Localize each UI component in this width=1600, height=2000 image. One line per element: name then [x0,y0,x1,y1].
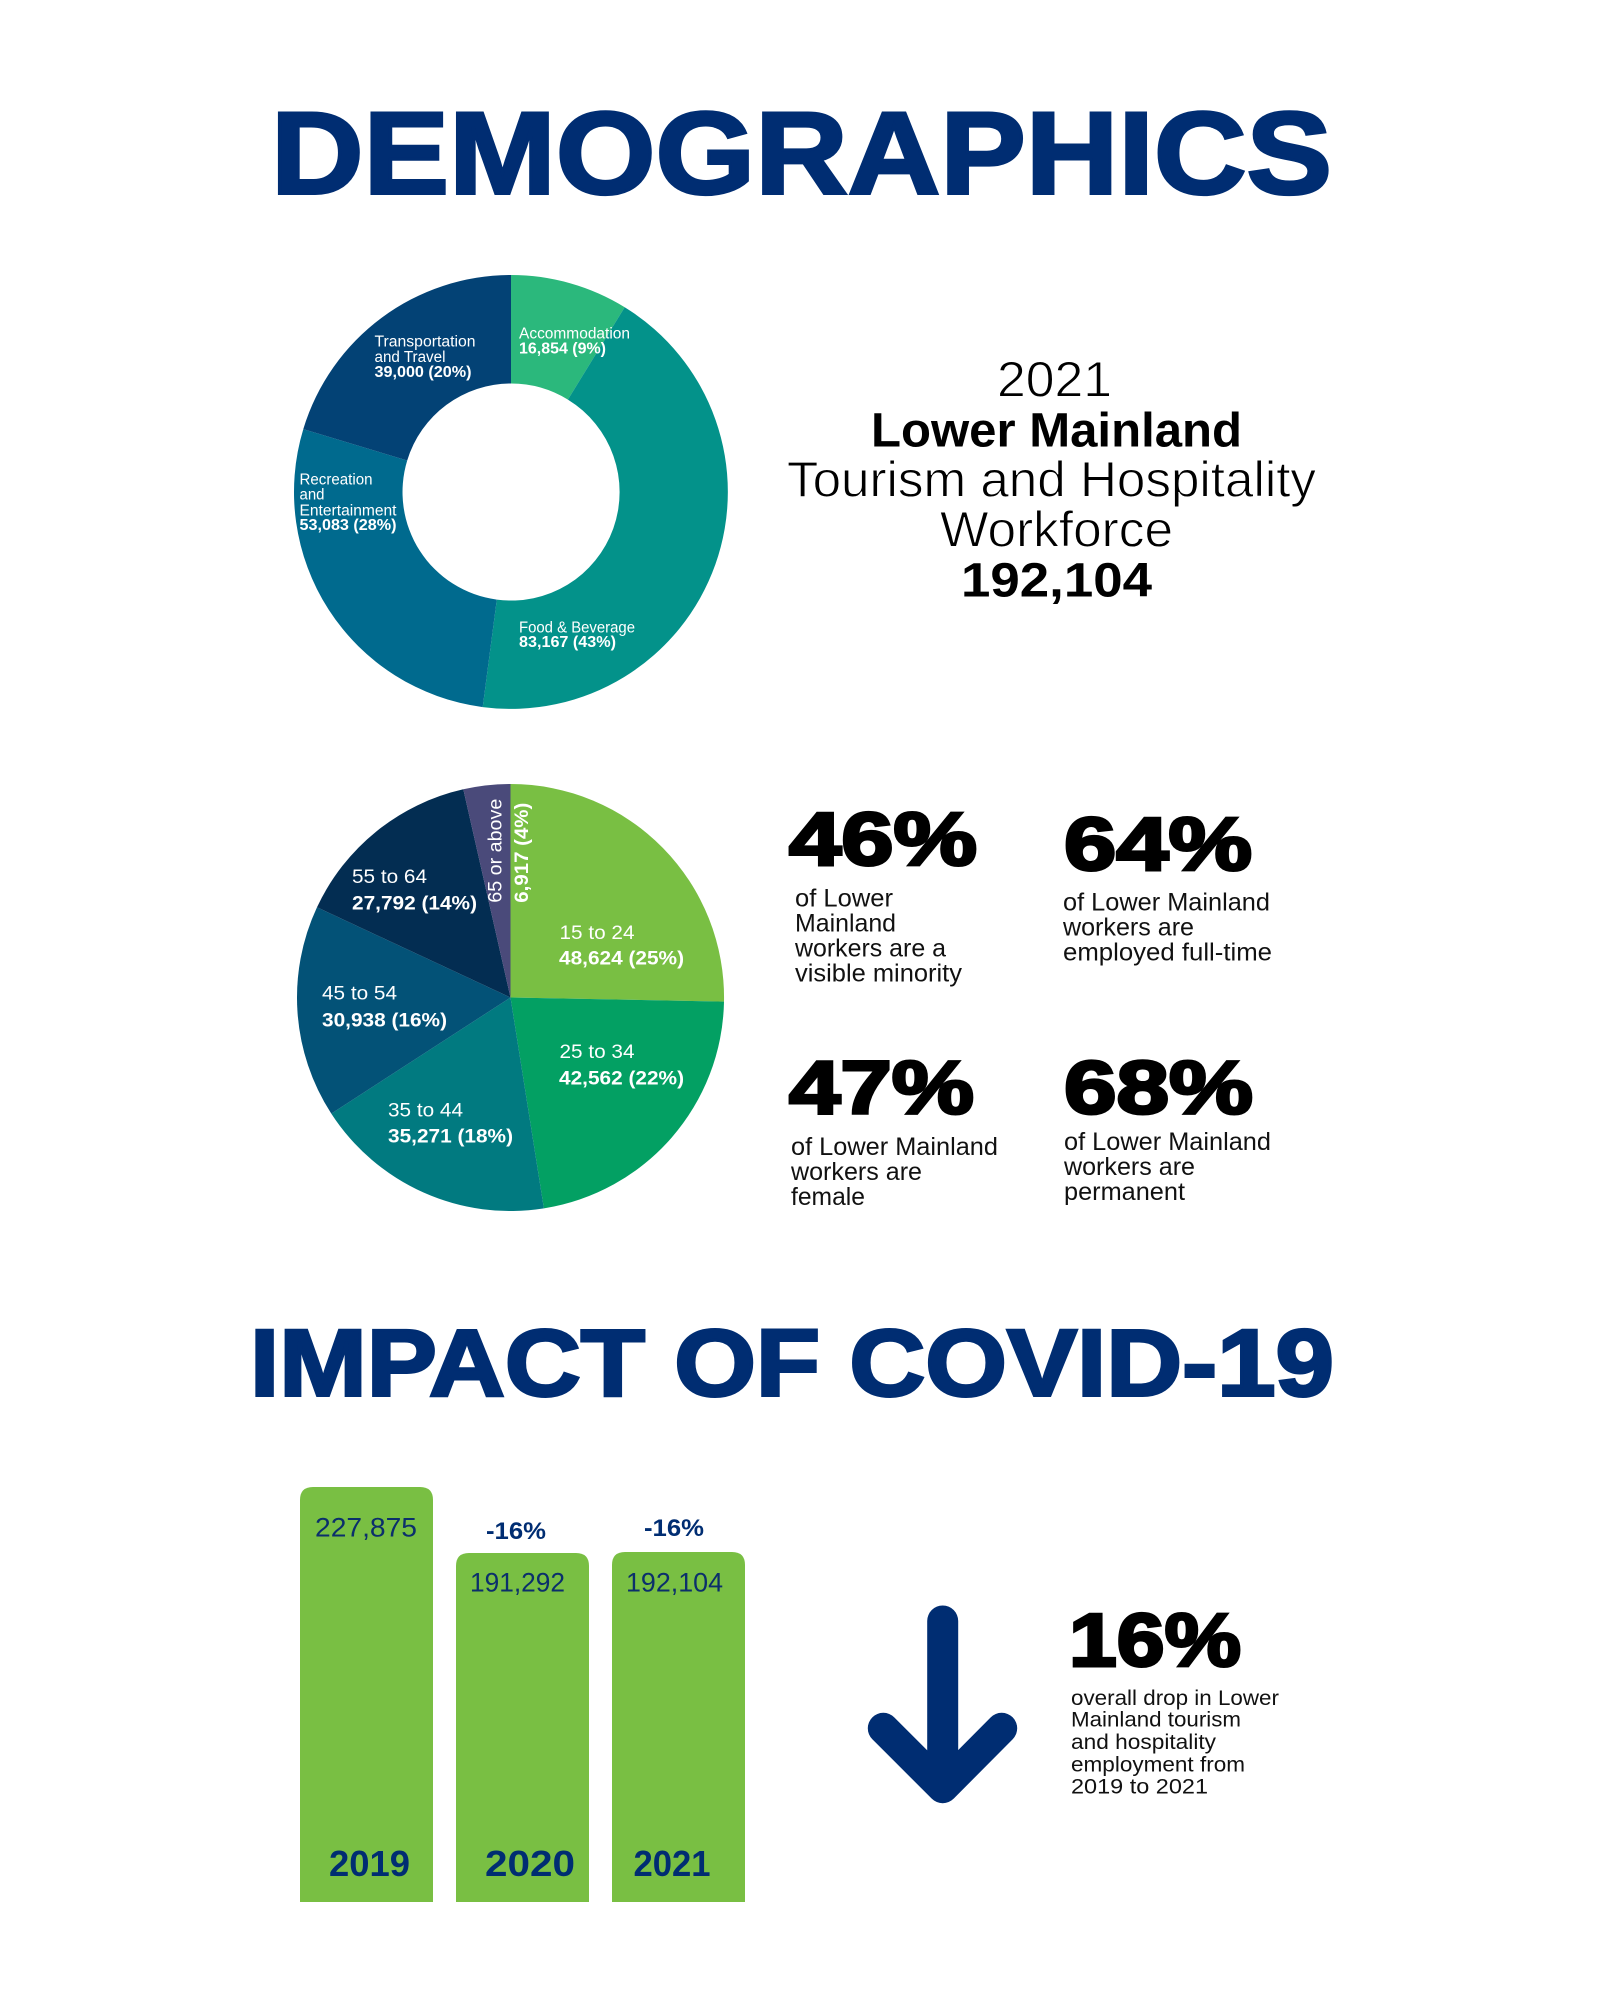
stat: full-time: 64% [1064,802,1252,886]
label: 55 to 64: 27,792 (14%) [352,892,477,914]
bar: 2020 [456,1553,589,1902]
label: 65 or above [484,799,533,903]
label: 45 to 54 [322,983,447,1032]
label: 35 to 44: 35 to 44 [388,1100,463,1122]
bar: 2019 [300,1487,433,1902]
text block: workforce total: 2021 [997,352,1112,408]
label: 65 or above: 6,917 (4%) [511,803,533,903]
stat: overall drop: overall drop in Lower [1071,1686,1279,1710]
bar chart: employment by year [300,1487,745,1902]
stat: full-time [1062,802,1272,967]
label: 25 to 34 [559,1041,684,1089]
slice: 25 to 34 [510,998,724,1208]
change: 2020: -16% [486,1518,546,1545]
year: 2021: 2021 [634,1843,710,1884]
text block: workforce total: 192,104 [961,555,1152,608]
label: recreation and entertainment: 53,083 (28%) [300,517,396,534]
text block: workforce total [787,352,1316,608]
label: accommodation: Accommodation [519,325,630,342]
stat: visible minority: of Lower [795,885,893,913]
label: recreation and entertainment [300,471,397,534]
stat: overall drop: 2019 to 2021 [1071,1774,1208,1798]
bar: 2021 [612,1552,745,1902]
label: recreation and entertainment: and [300,486,324,503]
label: food and beverage: Food & Beverage [519,619,635,636]
label: 45 to 54: 45 to 54 [322,983,397,1005]
label: accommodation: 16,854 (9%) [519,340,606,357]
stat: full-time: workers are [1062,914,1194,942]
slice: food and beverage [483,307,728,709]
label: 35 to 44 [388,1100,513,1148]
donut chart: workforce by sector [294,275,728,709]
label: 35 to 44: 35,271 (18%) [388,1126,513,1148]
stat: permanent: 68% [1064,1046,1253,1130]
stat: female: of Lower Mainland [791,1133,998,1161]
slice: 65 or above [463,784,510,998]
stat: female: female [791,1183,865,1211]
text block: workforce total: Tourism and Hospitality [787,452,1316,508]
stat: overall drop: 16% [1069,1598,1241,1682]
value: 2019: 227,875 [315,1513,417,1543]
label: 45 to 54: 30,938 (16%) [322,1010,447,1032]
label: 25 to 34: 25 to 34 [560,1041,635,1063]
label: transportation and travel [374,334,476,381]
slice: accommodation [511,275,625,400]
slice: transportation and travel [303,275,511,460]
label: food and beverage [519,619,635,651]
year: 2020: 2020 [485,1843,575,1884]
title: Demographics: DEMOGRAPHICS [271,88,1332,218]
label: 15 to 24 [559,922,684,970]
label: transportation and travel: 39,000 (20%) [374,364,472,381]
stat: visible minority: 46% [789,797,977,881]
text block: workforce total: Workforce [940,502,1173,558]
stat: visible minority: workers are a [794,935,946,963]
label: recreation and entertainment: Entertainment [300,502,397,519]
value: 2021: 192,104 [626,1568,723,1598]
label: 55 to 64: 55 to 64 [352,866,427,888]
label: 25 to 34: 42,562 (22%) [559,1067,684,1089]
stat: overall drop [1069,1598,1279,1798]
slice: 45 to 54 [297,907,510,1114]
stat: visible minority: visible minority [795,960,962,988]
heading: Impact of COVID-19: IMPACT OF COVID-19 [250,1310,1334,1416]
value: 2020: 191,292 [470,1568,565,1598]
label: food and beverage: 83,167 (43%) [519,634,616,651]
stat: visible minority: Mainland [795,910,896,938]
stat: female: workers are [790,1158,922,1186]
label: 55 to 64 [352,866,477,914]
stat: visible minority [789,797,977,988]
stat: overall drop: employment from [1071,1753,1245,1777]
label: accommodation [519,325,630,357]
stat: permanent [1063,1046,1271,1206]
label: 65 or above: 65 or above [484,799,506,903]
slice: 15 to 24 [510,784,724,1002]
label: 15 to 24: 48,624 (25%) [559,948,684,970]
label: 15 to 24: 15 to 24 [560,922,635,944]
stat: permanent: of Lower Mainland [1064,1128,1271,1156]
stat: female: 47% [789,1046,974,1130]
year: 2019: 2019 [329,1843,410,1884]
stat: permanent: workers are [1063,1153,1195,1181]
pie chart: workforce by age [297,784,724,1211]
stat: permanent: permanent [1064,1178,1185,1206]
stat: overall drop: Mainland tourism [1071,1708,1241,1732]
slice: 35 to 44 [331,998,544,1211]
label: recreation and entertainment: Recreation [300,471,372,488]
icon: down arrow [883,1621,1002,1788]
label: transportation and travel: Transportation [374,334,476,351]
slice: 55 to 64 [317,789,510,998]
stat: female [789,1046,998,1211]
text block: workforce total: Lower Mainland [871,405,1242,458]
stat: overall drop: and hospitality [1071,1730,1216,1754]
stat: full-time: employed full-time [1063,939,1272,967]
label: transportation and travel: and Travel [374,349,446,366]
stat: full-time: of Lower Mainland [1063,889,1270,917]
slice: recreation and entertainment [294,429,497,707]
change: 2021: -16% [644,1515,704,1542]
